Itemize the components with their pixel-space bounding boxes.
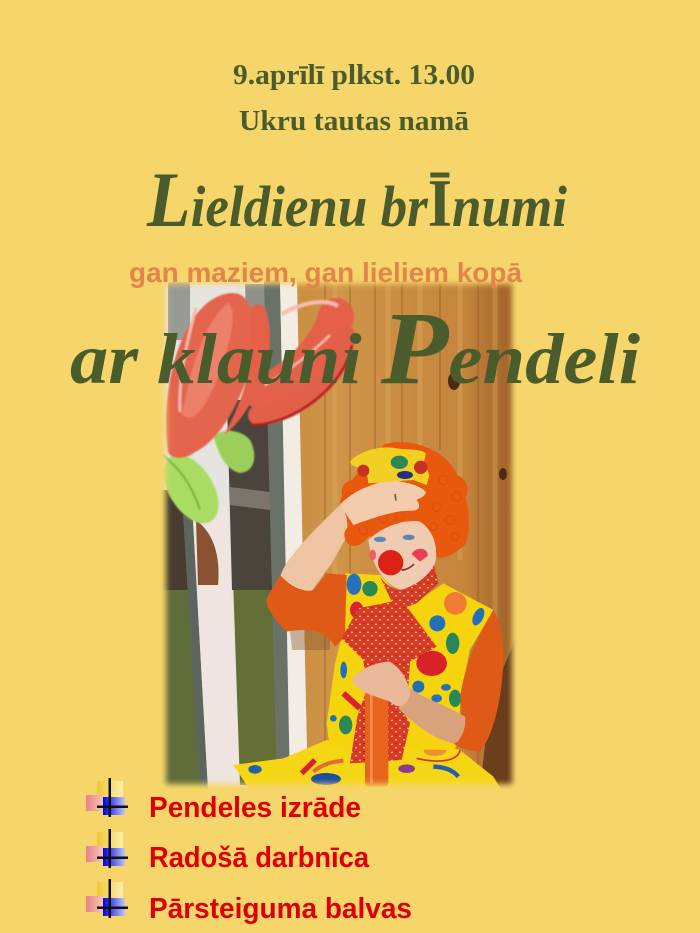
hand and forearm (398, 688, 465, 743)
skirt (233, 737, 502, 790)
face (368, 521, 436, 589)
hand (340, 480, 426, 525)
balloon flower (152, 293, 352, 533)
bullet icon 3 (86, 879, 128, 918)
clown figure (233, 442, 503, 790)
clown name heading: ar klauni Pendeli (70, 291, 640, 406)
item: show: Pendeles izrāde (149, 792, 361, 824)
balloon in hand (365, 690, 388, 787)
raised arm (280, 505, 353, 593)
left sleeve (266, 573, 347, 647)
item: prizes: Pārsteiguma balvas (149, 893, 412, 925)
bullet icon 2 (86, 829, 128, 868)
wood wall (297, 280, 516, 788)
hair (340, 442, 469, 558)
item: workshop: Radošā darbnīca (149, 842, 370, 874)
clown photo (152, 275, 520, 795)
dress (327, 573, 493, 750)
subtitle: gan maziem, gan lieliem kopā (129, 257, 522, 288)
poster (70, 64, 640, 924)
bullet icon 1 (86, 778, 128, 817)
hair curls (346, 475, 461, 541)
hat (350, 447, 429, 485)
scarf (342, 565, 438, 763)
right sleeve (453, 610, 503, 752)
venue: Ukru tautas namā (239, 106, 469, 137)
title: Lieldienu brĪnumi (146, 156, 567, 243)
window and frame (160, 275, 330, 790)
program list (86, 778, 412, 925)
date and time: 9.aprīlī plkst. 13.00 (233, 59, 475, 91)
